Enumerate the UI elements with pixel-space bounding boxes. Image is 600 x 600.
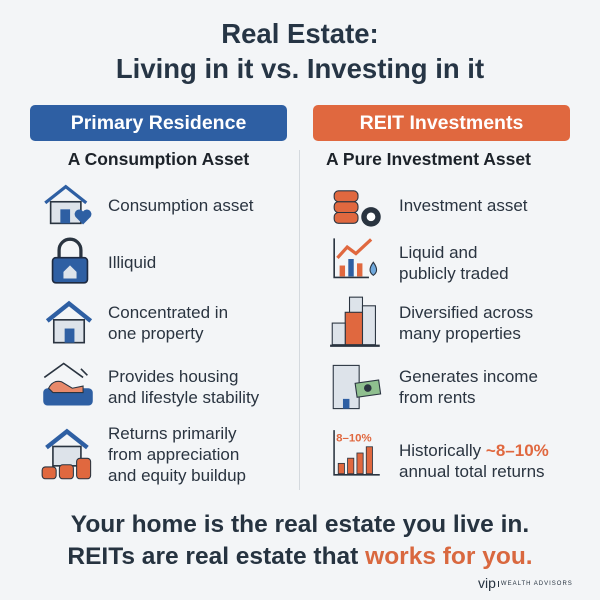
header: primary residence: Primary Residence	[71, 112, 246, 134]
title: Living in it vs. Investing in it	[116, 53, 484, 84]
text: provides housing: and lifestyle stability	[108, 388, 259, 407]
icon: house with heart	[44, 184, 92, 224]
text: historically: annual total returns	[399, 462, 545, 481]
text: provides housing: Provides housing	[108, 367, 238, 386]
text: illiquid: Illiquid	[108, 253, 156, 272]
header: REIT investments: REIT Investments	[360, 112, 523, 134]
text: diversified: many properties	[399, 324, 521, 343]
text: diversified	[399, 303, 533, 343]
icon: building and cash	[332, 364, 382, 410]
text: diversified: Diversified across	[399, 303, 533, 322]
text: generates income	[399, 367, 538, 407]
text: historically: Historically ~8–10%	[399, 441, 549, 460]
text: liquid	[399, 243, 509, 283]
text: returns: and equity buildup	[108, 466, 246, 485]
header: REIT investments	[313, 105, 570, 141]
text: returns: Returns primarily	[108, 424, 236, 443]
text: generates income: Generates income	[399, 367, 538, 386]
bottom tagline	[67, 511, 533, 570]
text: consumption asset: Consumption asset	[108, 196, 254, 215]
text: historically	[399, 441, 549, 481]
panel: left list	[42, 184, 260, 485]
text: liquid: publicly traded	[399, 264, 509, 283]
text: returns: from appreciation	[108, 445, 239, 464]
icon: person on sofa	[43, 362, 93, 406]
text: returns	[108, 424, 246, 485]
subheading right: A Pure Investment Asset	[326, 149, 531, 169]
text: investment asset: Investment asset	[399, 196, 528, 215]
icon: 8-10% chart: 8–10%	[336, 433, 372, 445]
panel: right list	[330, 190, 549, 481]
bottom tagline: REITs are real estate that works for you.	[67, 543, 533, 570]
header: primary residence	[30, 105, 287, 141]
subheading left: A Consumption Asset	[68, 149, 249, 169]
icon: coins and gear	[334, 190, 381, 227]
icon: chart with drop	[333, 238, 378, 278]
icon: padlock	[52, 238, 88, 284]
text: concentrated: one property	[108, 324, 203, 343]
text: liquid: Liquid and	[399, 243, 477, 262]
icon: house with coins	[42, 428, 92, 480]
bottom tagline: Your home is the real estate you live in.	[71, 511, 529, 538]
title: Real Estate:	[221, 18, 379, 49]
logo: vip WEALTH ADVISORS	[478, 575, 573, 591]
icon: house	[46, 300, 92, 344]
icon: 8-10% chart	[333, 430, 380, 476]
text: concentrated: Concentrated in	[108, 303, 228, 322]
title	[116, 18, 484, 84]
text: provides housing	[108, 367, 260, 407]
icon: buildings	[330, 296, 380, 347]
text: concentrated	[108, 303, 228, 343]
text: generates income: from rents	[399, 388, 476, 407]
